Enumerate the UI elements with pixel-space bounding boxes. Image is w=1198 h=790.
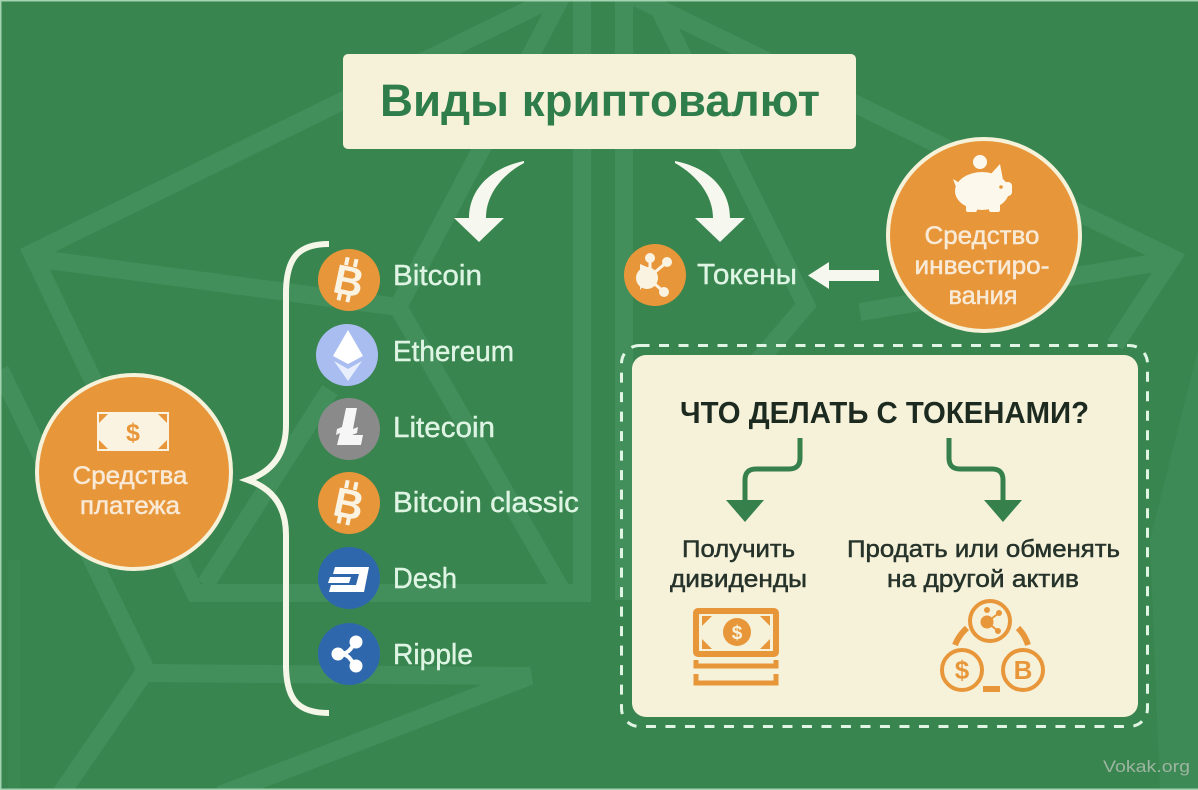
circle: means of payment: платежа xyxy=(80,492,180,520)
arrow: to tokens xyxy=(675,161,745,242)
coin: Bitcoin classic: Bitcoin classic xyxy=(393,487,579,519)
text: dividends xyxy=(670,536,807,593)
icon: banknote xyxy=(97,412,169,451)
coin: Litecoin: Litecoin xyxy=(393,412,495,444)
icon: token nodes xyxy=(636,253,672,297)
panel: what to do with tokens xyxy=(622,346,1148,726)
watermark: Vokak.org xyxy=(1103,757,1190,776)
brace xyxy=(248,244,329,713)
circle: investment: Средство xyxy=(924,222,1040,250)
coin: Ethereum xyxy=(316,324,514,386)
circle: investment: инвестиро- xyxy=(914,252,1050,280)
token label: Токены xyxy=(697,259,797,291)
icon: stack of money xyxy=(696,611,776,683)
text: sell or exchange: Продать или обменять xyxy=(847,536,1120,563)
circle: means of payment xyxy=(37,375,231,569)
panel heading: ЧТО ДЕЛАТЬ С ТОКЕНАМИ? xyxy=(680,395,1089,430)
circle: investment: вания xyxy=(948,282,1018,310)
arrow: investment to tokens xyxy=(808,262,879,289)
icon: exchange cycle: $ xyxy=(955,655,970,685)
coin: Bitcoin classic xyxy=(318,472,579,534)
icon: exchange cycle xyxy=(942,601,1043,690)
arrow: to coins xyxy=(454,161,524,242)
coin: Bitcoin: Bitcoin xyxy=(393,260,482,292)
circle: means of payment: Средства xyxy=(72,462,188,490)
coin: Bitcoin: B xyxy=(330,255,368,307)
coin: Ethereum: Ethereum xyxy=(393,336,514,368)
coin: Dash: Desh xyxy=(393,563,457,595)
icon: piggy bank xyxy=(953,155,1012,212)
token label xyxy=(624,244,797,306)
coin: Bitcoin xyxy=(318,249,482,311)
arrow: dividends xyxy=(726,438,800,522)
title xyxy=(343,54,856,149)
title: Виды криптовалют xyxy=(380,75,820,126)
icon: banknote: $ xyxy=(126,419,140,447)
coin: Ripple: Ripple xyxy=(393,639,473,671)
coin: Bitcoin classic: B xyxy=(330,478,368,530)
text: sell or exchange: на другой актив xyxy=(887,566,1079,593)
coin: Dash xyxy=(318,547,457,609)
coin: Litecoin xyxy=(318,398,495,460)
text: sell or exchange xyxy=(847,536,1120,593)
icon: stack of money: $ xyxy=(732,623,743,644)
icon: exchange cycle: B xyxy=(1014,655,1032,685)
circle: investment xyxy=(888,139,1080,331)
text: dividends: Получить xyxy=(682,536,795,563)
arrow: sell or exchange xyxy=(949,438,1022,522)
coin: Ripple xyxy=(318,623,473,685)
text: dividends: дивиденды xyxy=(670,566,807,593)
